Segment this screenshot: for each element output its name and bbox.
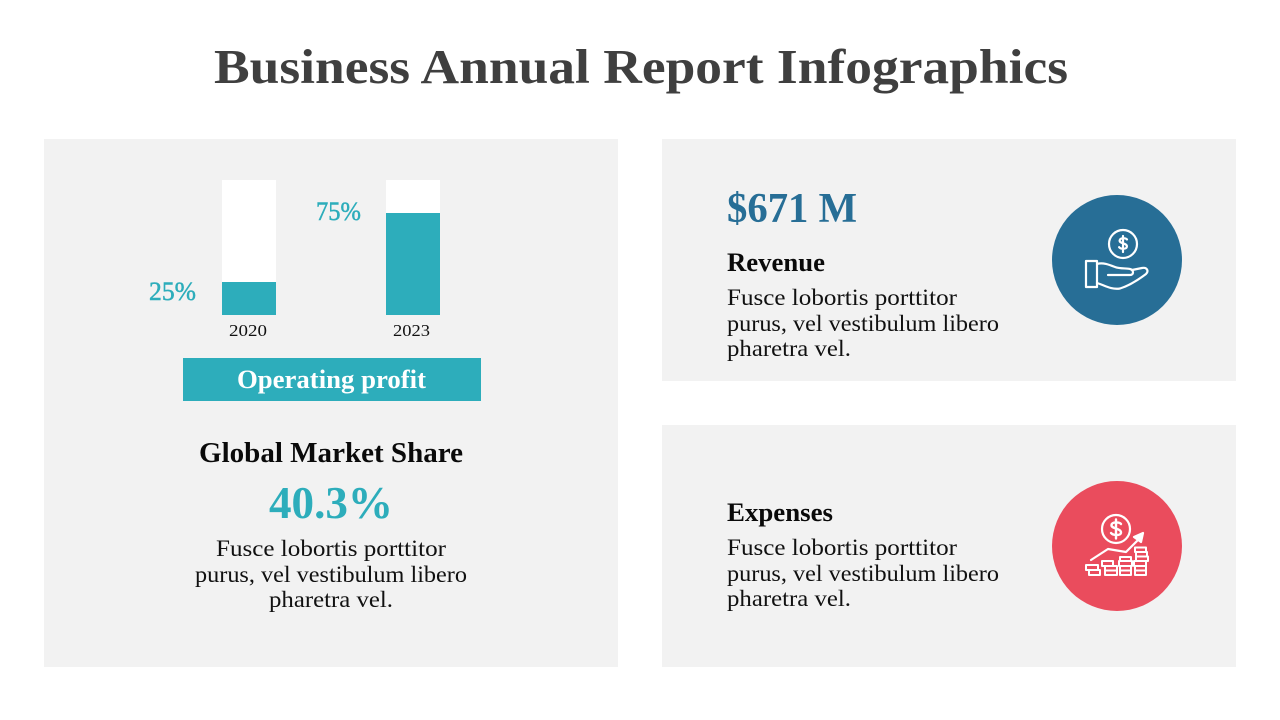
value label: 25%: 25%: [149, 277, 196, 306]
bar: 2020: [222, 180, 276, 315]
text block: expenses description: pharetra vel.: [727, 586, 851, 611]
title: Business Annual Report Infographics: [214, 39, 1068, 94]
text block: revenue description: [727, 285, 999, 361]
banner: operating profit: Operating profit: [237, 365, 426, 394]
axis label: 2023: 2023: [393, 321, 430, 340]
heading: revenue: Revenue: [727, 248, 825, 277]
text block: market share description: Fusce lobortis porttitor: [216, 536, 446, 561]
panel: revenue: [662, 139, 1236, 381]
panel: operating profit and market share: [44, 139, 618, 667]
bar: 2023: [386, 180, 440, 315]
text block: market share description: pharetra vel.: [269, 587, 393, 612]
icon: hand holding coin: [1052, 195, 1182, 325]
text block: market share description: [195, 536, 467, 612]
panel: expenses: [662, 425, 1236, 667]
stat: $671 M: $671 M: [727, 186, 857, 232]
banner: operating profit: [183, 358, 481, 401]
value label: 75%: 75%: [316, 197, 361, 226]
stat: 40.3%: 40.3%: [269, 478, 393, 528]
text block: revenue description: Fusce lobortis porttitor: [727, 285, 957, 310]
heading: expenses: Expenses: [727, 498, 833, 527]
axis label: 2020: 2020: [229, 321, 267, 340]
text block: expenses description: [727, 535, 999, 611]
text block: market share description: purus, vel vestibulum libero: [195, 562, 467, 587]
text block: revenue description: pharetra vel.: [727, 336, 851, 361]
heading: global market share: Global Market Share: [199, 438, 463, 469]
icon: rising coins: [1052, 481, 1182, 611]
bar chart: [149, 180, 440, 340]
text block: expenses description: purus, vel vestibulum libero: [727, 561, 999, 586]
text block: expenses description: Fusce lobortis porttitor: [727, 535, 957, 560]
text block: revenue description: purus, vel vestibulum libero: [727, 311, 999, 336]
